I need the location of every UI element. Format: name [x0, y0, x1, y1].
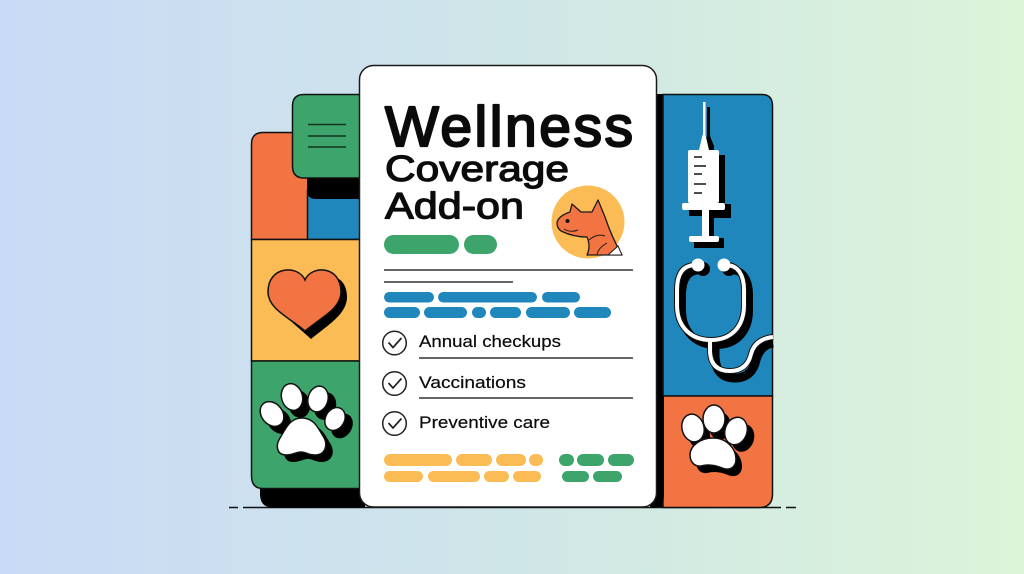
- divider lines: [384, 270, 633, 282]
- black band: [307, 175, 362, 199]
- yellow block: [252, 240, 362, 361]
- icon: stethoscope: [677, 258, 773, 378]
- green placeholder bars: [559, 454, 634, 482]
- checklist item: Annual checkups: [383, 331, 633, 358]
- panel: right stack: [650, 94, 773, 508]
- checklist item: Annual checkups: Annual checkups: [419, 332, 561, 351]
- blue placeholder text bars: [384, 292, 611, 318]
- blue block: [308, 190, 362, 240]
- orange block: [663, 396, 772, 508]
- green tag pills: [384, 235, 497, 254]
- checklist item: Preventive care: [383, 412, 550, 435]
- icon: dog in yellow circle: [552, 186, 624, 258]
- black spine: [650, 94, 664, 507]
- panel: main card: [360, 66, 656, 507]
- black spine lower: [650, 396, 664, 508]
- title: Coverage: Coverage: [385, 148, 569, 189]
- checklist item: Vaccinations: [383, 372, 633, 398]
- checklist item: Vaccinations: Vaccinations: [419, 373, 526, 392]
- panel: left stack: [252, 94, 365, 508]
- orange block: [252, 132, 310, 240]
- yellow placeholder bars: [384, 454, 543, 482]
- card body: [360, 66, 656, 507]
- icon: syringe: [682, 102, 731, 248]
- blue panel: [663, 94, 772, 396]
- title: Add-on: Add-on: [385, 186, 524, 226]
- ground line: [229, 506, 796, 508]
- black base shadow: [260, 480, 365, 508]
- icon: paw on green: [255, 381, 357, 462]
- checklist item: Preventive care: Preventive care: [419, 413, 550, 432]
- green block: [252, 361, 361, 488]
- green tab with lines: [292, 94, 362, 178]
- icon: paw on orange: [679, 405, 758, 476]
- title: Wellness: Wellness: [385, 95, 633, 159]
- icon: heart: [268, 270, 347, 339]
